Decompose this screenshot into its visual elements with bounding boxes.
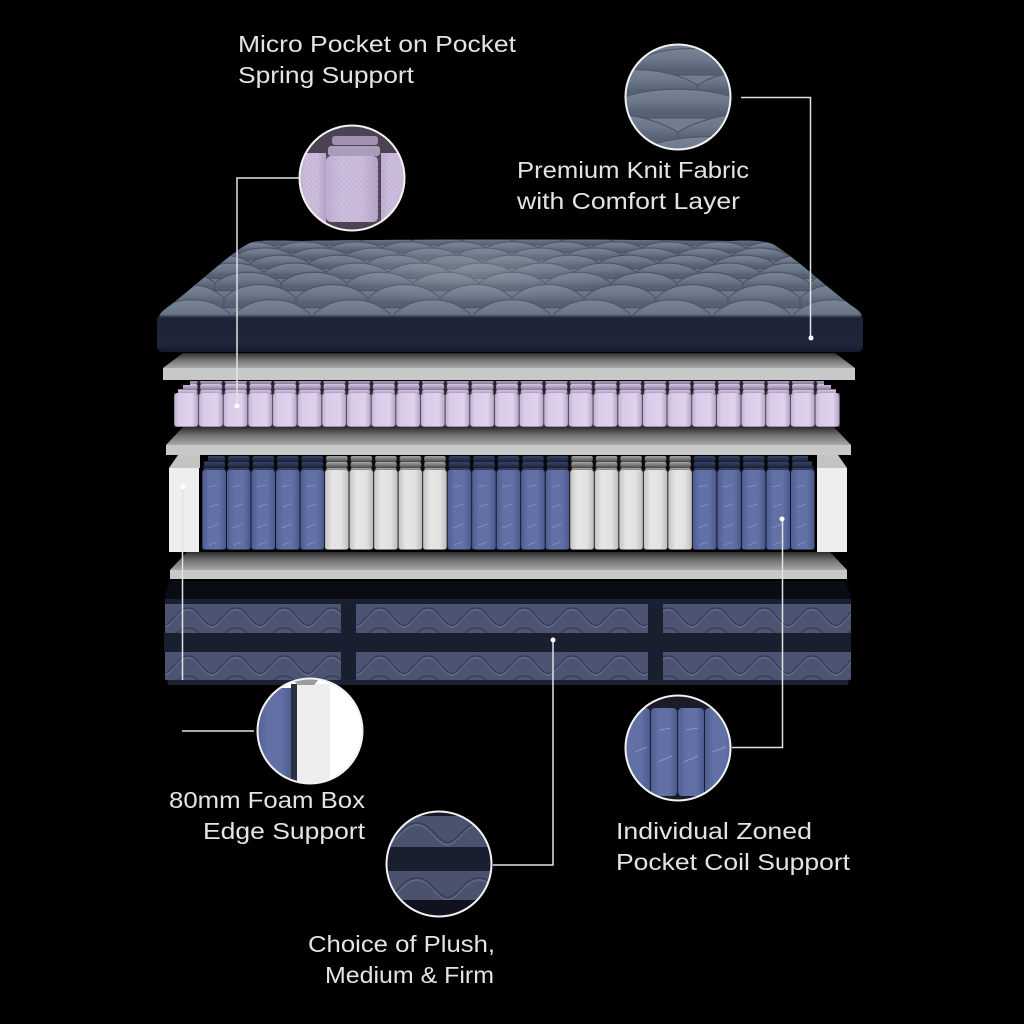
layer: micro pocket springs — [174, 381, 840, 427]
layer: zoned pocket coils — [169, 455, 847, 552]
label: individual zoned pocket coil support: Individual Zoned — [616, 818, 812, 844]
leader line: foam box edge — [180, 484, 254, 731]
label: choice of comfort: Medium & Firm — [325, 962, 494, 988]
label: premium knit fabric — [516, 157, 749, 214]
label: micro pocket spring support: Spring Support — [238, 62, 415, 88]
layer: base with wave quilted border — [164, 581, 851, 685]
label: micro pocket spring support: Micro Pocket on Pocket — [238, 31, 517, 57]
label: premium knit fabric: with Comfort Layer — [516, 188, 740, 214]
label: foam box edge support: 80mm Foam Box — [169, 787, 366, 813]
label: micro pocket spring support — [238, 31, 517, 88]
leader line: zoned pocket coils — [732, 516, 784, 748]
label: individual zoned pocket coil support — [616, 818, 851, 875]
mattress top side panel — [157, 315, 863, 352]
detail circle: zoned coils — [620, 694, 735, 802]
label: foam box edge support — [169, 787, 366, 844]
label: individual zoned pocket coil support: Pocket Coil Support — [616, 849, 851, 875]
left foam box edge — [169, 455, 200, 552]
mattress: exploded layer stack — [157, 240, 863, 685]
label: foam box edge support: Edge Support — [203, 818, 366, 844]
right foam box edge — [817, 455, 847, 552]
layer: premium knit quilted top — [157, 240, 863, 352]
label: premium knit fabric: Premium Knit Fabric — [517, 157, 749, 183]
label: choice of comfort: Choice of Plush, — [308, 931, 495, 957]
layer: middle foam sheet — [166, 427, 851, 455]
leader line: micro pocket springs — [234, 178, 299, 408]
leader line: premium knit fabric — [741, 98, 814, 340]
layer: lower foam sheet — [170, 552, 847, 579]
label: choice of comfort — [308, 931, 495, 988]
detail circle: pocket spring — [298, 124, 409, 233]
detail circle: knit fabric — [624, 44, 732, 150]
leader line: comfort choice — [493, 638, 556, 865]
detail circle: base quilted border — [385, 810, 493, 920]
detail circle: foam box edge — [256, 678, 364, 786]
layer: upper foam sheet — [163, 353, 855, 380]
